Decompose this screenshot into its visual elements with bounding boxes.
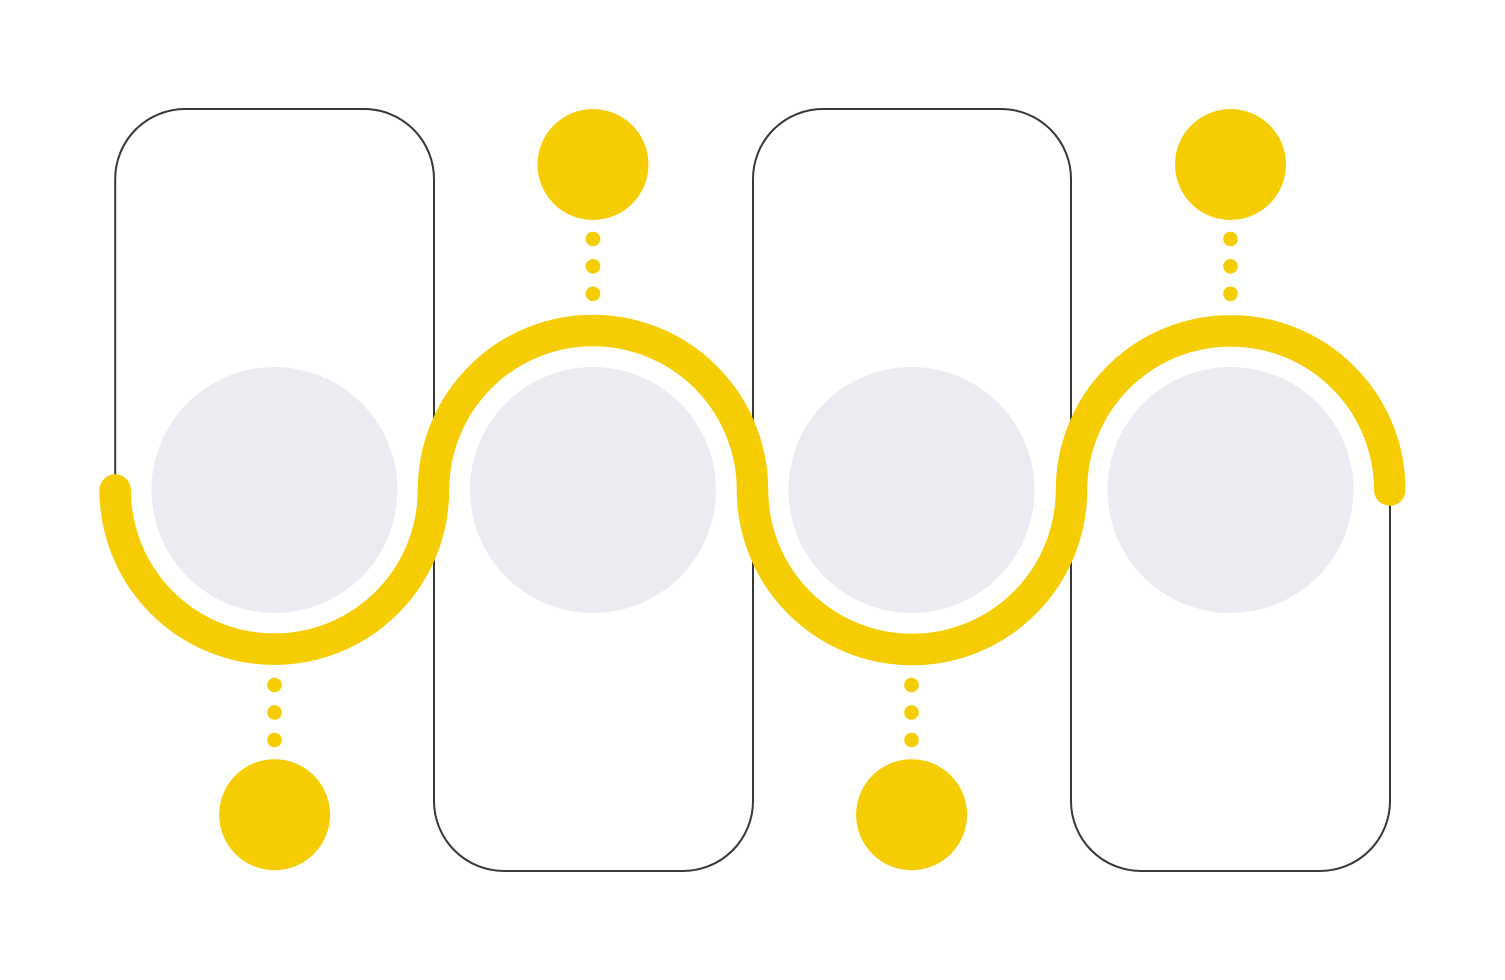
yellow circle top 4 <box>1175 109 1286 220</box>
panel 1 outline <box>115 109 434 490</box>
dots: step 1 <box>267 678 282 747</box>
yellow circle bottom 1 <box>219 759 330 870</box>
dots: step 2 <box>586 232 600 301</box>
dots: step 4 <box>1223 232 1238 301</box>
dots: step 3 <box>904 678 919 747</box>
yellow circle bottom 3 <box>856 759 967 870</box>
panel 4 outline <box>1071 490 1390 871</box>
grey circle 4 <box>1108 367 1354 613</box>
yellow circle top 2 <box>538 109 648 220</box>
grey circle 1 <box>152 367 398 613</box>
panel 3 outline <box>753 109 1071 490</box>
yellow wave connector <box>115 330 1390 650</box>
grey circle 2 <box>470 367 716 613</box>
grey circle 3 <box>788 367 1034 613</box>
panel 2 outline <box>434 490 753 871</box>
